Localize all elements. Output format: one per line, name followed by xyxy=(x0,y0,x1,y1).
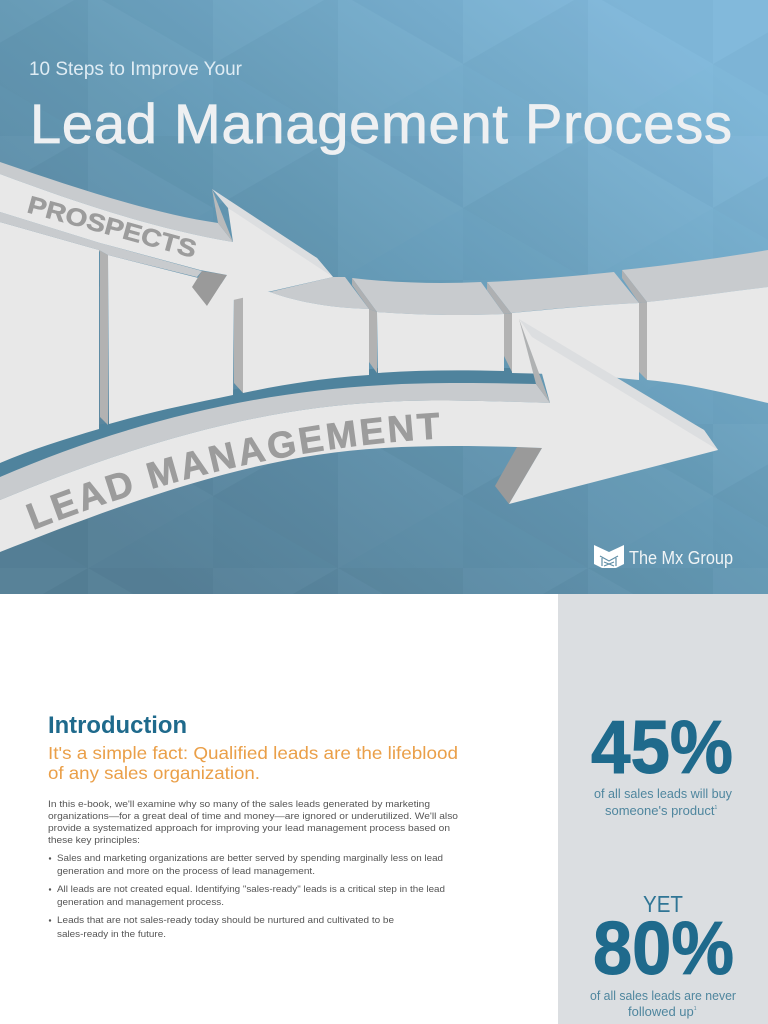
body paragraph xyxy=(48,799,458,846)
prospects notch shadow xyxy=(192,271,227,306)
prospects arrow face xyxy=(0,174,333,306)
80% figure: 80% xyxy=(593,907,734,991)
bullet two: generation and management process. xyxy=(57,897,224,908)
lead management label: LEAD MANAGEMENT xyxy=(26,412,439,530)
logo: The Mx Group xyxy=(594,545,733,568)
logo wordmark: The Mx Group xyxy=(629,547,733,568)
lead management arrow face xyxy=(0,337,718,552)
45% figure: 45% xyxy=(591,706,733,790)
body paragraph: In this e-book, we'll examine why so many of the sales leads generated by marketing xyxy=(48,799,430,810)
80% caption xyxy=(590,988,737,1019)
lead management head inner edge xyxy=(519,319,550,403)
orange lead-in xyxy=(48,743,458,783)
bullet three: Leads that are not sales-ready today should be nurtured and cultivated to be xyxy=(57,915,394,926)
panel: statistics sidebar xyxy=(558,594,768,1024)
prospects band top ledge xyxy=(0,162,233,242)
80% caption: 1 xyxy=(694,1006,697,1012)
prospects band lower ledge xyxy=(0,212,202,277)
stat: 80 percent xyxy=(590,907,737,1019)
80% caption: followed up xyxy=(628,1004,694,1019)
body paragraph: these key principles: xyxy=(48,835,140,846)
prospects head bevel xyxy=(212,189,333,277)
wall posts xyxy=(93,243,647,425)
wall panels xyxy=(0,222,768,463)
subtitle: 10 Steps to Improve Your xyxy=(29,59,243,80)
hero background xyxy=(0,0,768,594)
prospects label: PROSPECTS xyxy=(24,192,199,264)
logo icon xyxy=(594,545,624,568)
bullet two xyxy=(49,884,445,908)
45% caption xyxy=(594,786,732,818)
bullet one: Sales and marketing organizations are better served by spending marginally less on lead xyxy=(57,853,443,864)
wall ledge side shadows xyxy=(352,270,647,314)
sidebar background xyxy=(558,594,768,1024)
wall top ledges xyxy=(270,250,768,315)
orange lead-in: of any sales organization. xyxy=(48,763,260,783)
stat: 45 percent xyxy=(591,706,733,818)
lead management notch shadow xyxy=(495,447,542,504)
45% caption: of all sales leads will buy xyxy=(594,786,732,801)
panel: introduction text xyxy=(48,712,458,940)
orange lead-in: It's a simple fact: Qualified leads are the lifeblood xyxy=(48,743,458,763)
bullet three: sales-ready in the future. xyxy=(57,929,166,940)
lead management band ledge xyxy=(0,383,550,500)
45% caption: 1 xyxy=(714,805,717,811)
45% caption: someone's product xyxy=(605,803,714,818)
body paragraph: provide a systematized approach for improving your lead management process based on xyxy=(48,823,450,834)
shadow gap under wall xyxy=(0,368,540,490)
wall illustration xyxy=(0,222,768,490)
lead management head bevel xyxy=(519,319,718,450)
YET label: YET xyxy=(643,891,683,917)
bullet list xyxy=(49,853,445,940)
bullet two: All leads are not created equal. Identifying "sales-ready" leads is a critical step in the lead xyxy=(57,884,445,895)
panel: hero banner xyxy=(0,0,768,594)
bullet three xyxy=(49,915,394,940)
bullet one: generation and more on the process of lead management. xyxy=(57,866,315,877)
arrow: lead management xyxy=(0,320,718,552)
introduction heading: Introduction xyxy=(48,712,187,739)
80% caption: of all sales leads are never xyxy=(590,988,737,1003)
title: Lead Management Process xyxy=(30,92,732,155)
arrow: prospects xyxy=(0,162,333,306)
body paragraph: organizations—for a great deal of time and money—are ignored or underutilized. We'll also xyxy=(48,811,458,822)
bullet one xyxy=(49,853,443,877)
prospects head inner edge xyxy=(212,189,233,242)
